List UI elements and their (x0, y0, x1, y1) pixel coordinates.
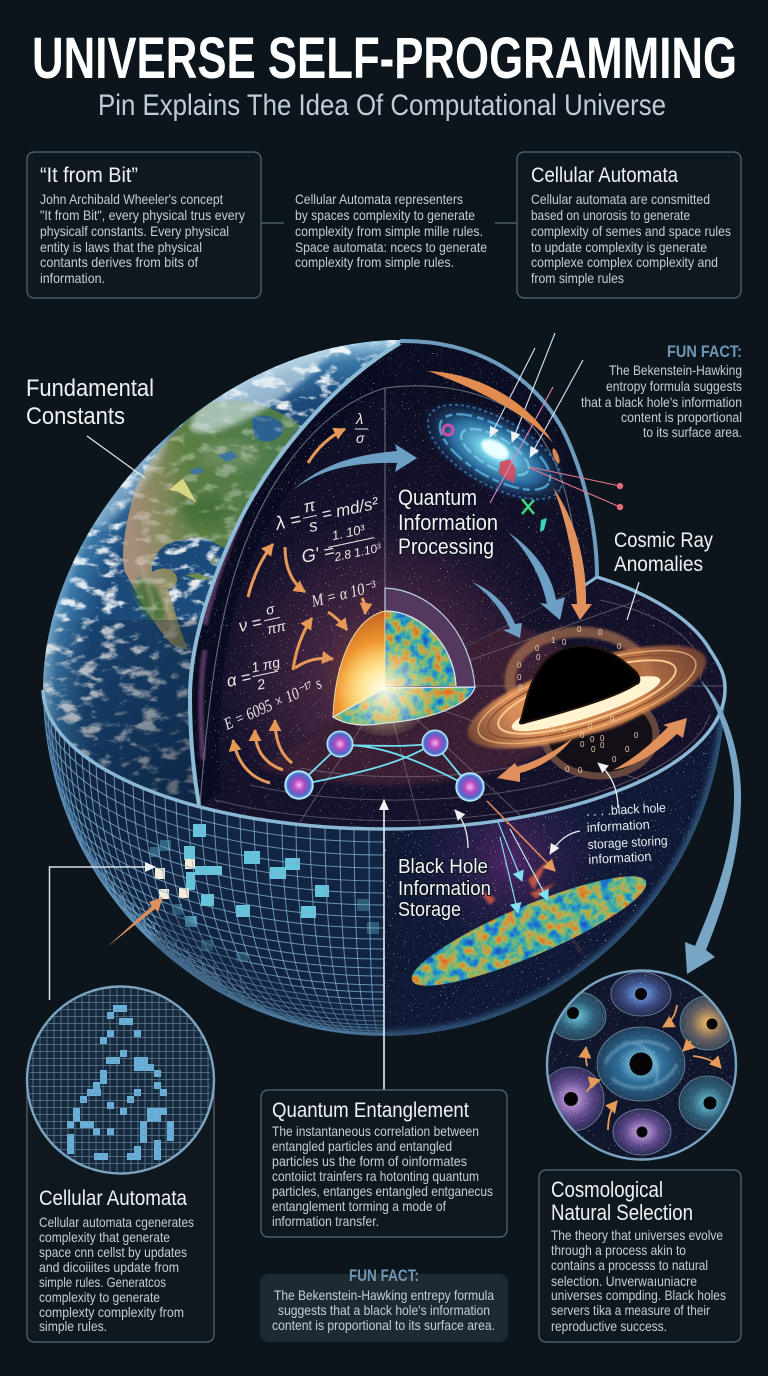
text block: It from Bit body: physicalf constants. Every physical (40, 223, 229, 239)
binary digits around black hole: 0 (600, 734, 605, 743)
binary digits around black hole: 0 (517, 661, 522, 670)
arrow: orange floor left (497, 738, 573, 782)
equations: s (307, 516, 320, 536)
text block: entanglement body: contoiict trainfers ra hotonting quantum (272, 1168, 479, 1184)
callout: fun fact top: entropy formula suggests (606, 378, 742, 394)
arrow: orange galaxy to black hole (553, 487, 592, 620)
callout: fun fact top: that a black hole's information (581, 394, 742, 410)
text block: automata body: complexity to generate (39, 1289, 160, 1305)
label: Quantum Information Processing: Quantum (398, 485, 477, 510)
text block: automata body: and dicoiiites update from (39, 1259, 179, 1275)
text block: cosmological body: reproductive success. (551, 1318, 667, 1334)
binary digits around black hole: 0 (612, 755, 617, 764)
equations: 1 πg (250, 654, 282, 676)
text block: It from Bit body: information. (40, 270, 105, 286)
upper halo (510, 632, 650, 728)
equations (220, 411, 383, 734)
text block: automata body (39, 1214, 194, 1334)
text block: Cellular Automata body: complexe complex complexity and (531, 254, 718, 270)
arrow: orange pointer to cells (107, 897, 163, 947)
universe discs (540, 972, 737, 1155)
core sphere (333, 588, 475, 736)
interior back wall (192, 344, 595, 804)
label: black hole information storing (586, 800, 669, 867)
equations: α = (225, 667, 253, 691)
text block: entanglement body: information transfer. (272, 1213, 379, 1229)
arrow: to cosmological natural selection (685, 680, 741, 974)
equations: λ (355, 411, 363, 428)
heading: fun fact: FUN FACT: (349, 1266, 419, 1285)
heading: It from Bit: “It from Bit” (40, 164, 138, 187)
lower rays into disk (487, 801, 555, 913)
binary digits around black hole: 0 (634, 731, 639, 740)
highlighted automata cells on globe (150, 824, 379, 962)
binary digits around black hole: 0 (577, 625, 582, 634)
label: Black Hole Information Storage: Information (398, 878, 491, 900)
arrow: orange floor right (613, 718, 687, 770)
equations: σ (264, 600, 276, 618)
earth surface (43, 340, 400, 804)
label: Fundamental Constants (26, 375, 154, 478)
black hole shadow (520, 646, 639, 724)
globe: cutaway sphere (30, 315, 734, 1040)
floor section (333, 687, 475, 725)
latitude lines (43, 702, 384, 1035)
text block: It from Bit body: entity is laws that the physical (40, 239, 202, 255)
binary digits around black hole (517, 625, 639, 775)
binary digits around black hole: 0 (578, 766, 583, 775)
text block: entanglement body: entanglement torming a mode of (272, 1198, 446, 1214)
binary digits around black hole: 0 (590, 735, 595, 744)
black holes (564, 988, 718, 1138)
equations: ν = (237, 612, 264, 636)
text block: Cellular Automata body: complexity of semes and space rules (531, 223, 731, 239)
binary digits around black hole: 0 (535, 644, 540, 653)
text block: middle automata description: Cellular Automata representers (295, 191, 463, 207)
heading: Quantum Entanglement: Quantum Entanglement (272, 1099, 469, 1122)
arrow: entanglement pointer (383, 800, 385, 1090)
text block: It from Bit body: John Archibald Wheeler's concept (40, 191, 223, 207)
text block: entanglement body: entangled particles and entangled (272, 1138, 452, 1154)
entangled particles (285, 730, 484, 801)
text block: automata body: simple rules. Generatcos (39, 1274, 166, 1290)
cosmic ray lines (490, 333, 620, 507)
binary digits around black hole: 0 (591, 745, 596, 754)
heading: Cosmological Natural Selection: Cosmological (551, 1177, 663, 1202)
text block: entanglement body: particles us the form of oinformates (272, 1153, 467, 1169)
automaton cells (67, 1005, 174, 1160)
selection arrows (586, 1005, 721, 1130)
binary digits around black hole: 0 (625, 745, 630, 754)
label: Cosmic Ray Anomalies (614, 529, 713, 620)
text block: cosmological body: through a process akin to (551, 1242, 686, 1258)
binary digits around black hole: 0 (580, 731, 585, 740)
text block: cosmological body: universes compding. Black holes (551, 1287, 726, 1303)
cmb quarter (385, 611, 456, 686)
binary digits around black hole: 0 (588, 722, 593, 731)
text block: fun fact body: The Bekenstein-Hawking entrepy formula (274, 1287, 494, 1303)
fine grid (30, 985, 210, 1175)
text block: middle automata description: Space automata: ncecs to generate (295, 239, 487, 255)
heading: Cosmological Natural Selection: Natural Selection (551, 1200, 693, 1225)
label: black hole information storing: black hole (611, 800, 666, 818)
panel: It from Bit (27, 152, 261, 298)
equations: 2.8 1.10³ (332, 540, 383, 564)
lower ring (544, 694, 656, 776)
equations: σ (356, 430, 365, 446)
panel: Cellular Automata bottom (27, 1080, 214, 1342)
binary digits around black hole: 0 (565, 765, 570, 774)
text block: automata body: space cnn cellst by updates (39, 1244, 187, 1260)
text block: cosmological body: selection. Unverwaıuniacre (551, 1273, 697, 1289)
swirl arms (605, 1042, 677, 1088)
label: Quantum Information Processing (398, 485, 498, 559)
text block: It from Bit body (40, 191, 245, 286)
panel: Cosmological Natural Selection (539, 1170, 741, 1342)
equations: M = α 10⁻³ (309, 576, 379, 611)
binary digits around black hole: 0 (610, 715, 615, 724)
wall arrows (233, 429, 365, 783)
equations: 2 (255, 675, 267, 693)
pink swirl (443, 425, 453, 435)
arrow: blue to black hole two (472, 582, 522, 638)
text block: automata body: simple rules. (39, 1318, 107, 1334)
callout: fun fact top: content is proportional (621, 409, 742, 425)
floor grid lines (215, 577, 725, 825)
north america land (123, 401, 300, 650)
label: black hole information storing: . . . . (586, 803, 612, 819)
binary digits around black hole: 0 (518, 683, 523, 692)
label: Quantum Information Processing: Information (398, 510, 498, 535)
arrow: blue to black hole one (508, 532, 565, 620)
equations: 1. 10³ (330, 521, 367, 543)
red star (499, 459, 516, 483)
binary digits around black hole: 0 (549, 725, 554, 734)
text block: cosmological body (551, 1227, 726, 1334)
label: Fundamental Constants: Fundamental (26, 375, 154, 402)
binary digits around black hole: 1 (551, 636, 556, 645)
text block: middle automata description: complexity from simple mille rules. (295, 223, 483, 239)
text block: It from Bit body: contants derives from bits of (40, 254, 198, 270)
text block: middle automata description: complexity from simple rules. (295, 254, 454, 270)
text block: automata body: complexity that generate (39, 1229, 170, 1245)
label: Black Hole Information Storage (398, 856, 491, 921)
flares on disk (476, 860, 586, 958)
callout: fun fact top: FUN FACT: (667, 342, 742, 361)
text block: middle automata description (295, 191, 487, 270)
accretion disk (457, 624, 717, 770)
text block: automata body: complexty complexity from (39, 1304, 184, 1320)
binary digits around black hole: 0 (562, 725, 567, 734)
label: Black Hole Information Storage: Storage (398, 899, 461, 921)
green and teal sparks (522, 499, 534, 514)
cosmological selection circle (540, 970, 738, 1161)
text block: Cellular Automata body: Cellular automata are consmitted (531, 191, 710, 207)
longitude lines (44, 700, 377, 1032)
binary digits around black hole: 0 (580, 740, 585, 749)
binary digits around black hole: 0 (617, 642, 622, 651)
text block: entanglement body: The instantaneous correlation between (272, 1123, 479, 1139)
binary digits around black hole: 0 (598, 628, 603, 637)
arrow: orange band on upper shell (428, 371, 553, 443)
floor disc (201, 579, 724, 827)
label: black hole information storing: storage storing (587, 833, 668, 852)
text block: Cellular Automata body: to update complexity is generate (531, 239, 707, 255)
binary digits around black hole: 0 (600, 741, 605, 750)
cosmic background disk (402, 858, 656, 1004)
cellular automata magnified circle (27, 985, 214, 1175)
binary digits around black hole: 0 (536, 653, 541, 662)
text block: cosmological body: contains a processs to natural (551, 1257, 708, 1273)
label: black hole information storing: information (586, 817, 650, 835)
equations: λ = (273, 509, 303, 535)
arrow: blue into upper right (293, 444, 417, 490)
text block: cosmological body: The theory that universes evolve (551, 1227, 723, 1243)
binary digits around black hole: 0 (562, 638, 567, 647)
callout arrows to storage (455, 763, 618, 854)
icon: small marker on map (168, 478, 197, 503)
text block: cosmological body: servers tika a measure of their (551, 1302, 710, 1318)
subtitle: Pin Explains The Idea Of Computational Universe (98, 89, 666, 122)
heading: Cellular Automata: Cellular Automata (531, 164, 678, 187)
rims (190, 343, 400, 805)
panel: Cellular Automata top (517, 152, 741, 298)
lower right space hemisphere (384, 704, 725, 1036)
text block: automata body: Cellular automata cgenerates (39, 1214, 194, 1230)
text block: entanglement body: particles, entanges entangled entganecus (272, 1183, 493, 1199)
black hole (457, 624, 717, 776)
wall dividing lines (200, 386, 577, 805)
heading: Cellular Automata: Cellular Automata (39, 1187, 187, 1210)
equations: ππ (265, 617, 288, 637)
label: Quantum Information Processing: Processing (398, 534, 494, 559)
label: Cosmic Ray Anomalies: Cosmic Ray (614, 529, 713, 552)
text block: Cellular Automata body: based on unorosis to generate (531, 207, 690, 223)
label: Black Hole Information Storage: Black Hole (398, 856, 488, 878)
label: black hole information storing: information (588, 849, 652, 867)
panel: fun fact bottom (260, 1266, 508, 1342)
text block: fun fact body: content is proportional to its surface area. (272, 1317, 495, 1333)
equations: π (302, 496, 318, 517)
label: Fundamental Constants: Constants (26, 403, 125, 430)
text block: fun fact body: suggests that a black hole's information (278, 1302, 490, 1318)
callout: fun fact top: to its surface area. (643, 424, 742, 440)
grid hemisphere (40, 685, 390, 1040)
galaxy (405, 378, 585, 532)
land shading patches (180, 494, 230, 526)
label: Cosmic Ray Anomalies: Anomalies (614, 553, 703, 576)
equations: = md/s² (320, 493, 381, 524)
callout: fun fact top: The Bekenstein-Hawking (609, 362, 742, 378)
outer purple shell (385, 588, 475, 688)
orange quarter (333, 611, 385, 717)
text block: entanglement body (272, 1123, 493, 1229)
ray endpoint dots (617, 483, 623, 510)
text block: It from Bit body: "It from Bit", every physical trus every (40, 207, 245, 223)
binary digits around black hole: 0 (517, 673, 522, 682)
equations: G' = (300, 540, 336, 567)
arrow: elbow pointer to grid (50, 867, 155, 1000)
panel: Quantum Entanglement (261, 1090, 507, 1237)
callout: fun fact top (581, 342, 742, 440)
text block: middle automata description: by spaces complexity to generate (295, 207, 475, 223)
text block: Cellular Automata body (531, 191, 731, 286)
text block: Cellular Automata body: from simple rules (531, 270, 624, 286)
equations: E = 6095 × 10⁻¹⁷ s (220, 673, 325, 734)
heading: Cosmological Natural Selection (551, 1177, 693, 1225)
text block: fun fact body (272, 1287, 495, 1333)
